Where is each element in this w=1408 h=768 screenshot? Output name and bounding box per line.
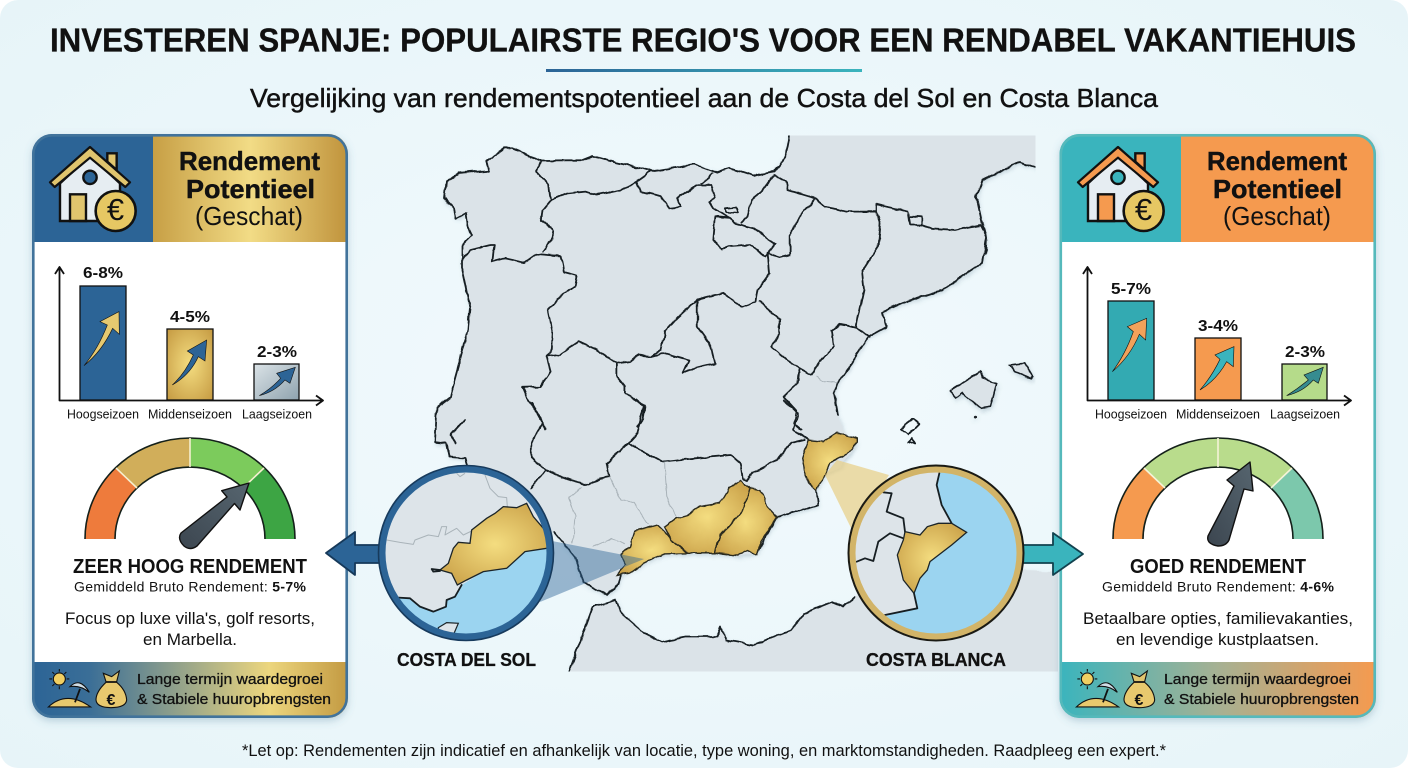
icon text: bag euro: €	[1135, 692, 1144, 709]
description text	[1083, 610, 1353, 649]
heading: Rendement Potentieel	[1207, 146, 1347, 231]
heading: Rendement Potentieel: (Geschat)	[195, 201, 303, 231]
footnote: *Let op: Rendementen zijn indicatief en afhankelijk van locatie, type woning, en marktomstandigheden. Raadpleeg een expert.*	[242, 741, 1166, 760]
footer text: Lange termijn waardegroei	[137, 672, 323, 688]
bar chart: seasonal returns	[55, 265, 323, 422]
footer icons: beach and money bag	[1076, 669, 1155, 708]
title: INVESTEREN SPANJE: POPULAIRSTE REGIO'S VOOR EEN RENDABEL VAKANTIEHUIS	[50, 22, 1356, 58]
arrow: Costa del Sol to left panel	[326, 532, 382, 575]
bar chart: seasonal returns: 3-4%	[1198, 318, 1238, 335]
rating text	[73, 555, 307, 594]
bar chart: seasonal returns: Hoogseizoen	[67, 408, 139, 422]
footer text: & Stabiele huuropbrengsten	[1164, 692, 1359, 708]
bar chart: seasonal returns: 6-8%	[83, 265, 123, 282]
footer icons: beach and money bag	[48, 669, 127, 708]
land: Iberia and France	[435, 128, 1065, 680]
connector: Costa del Sol zoom beam	[540, 540, 644, 602]
bar chart: seasonal returns: Middenseizoen	[148, 408, 232, 422]
description text: en Marbella.	[143, 631, 237, 649]
regional borders north	[462, 161, 987, 430]
rating text: GOED RENDEMENT	[1130, 555, 1306, 578]
heading: Rendement Potentieel	[179, 146, 320, 231]
map of Spain	[435, 128, 1065, 680]
Balearic islands	[950, 363, 1033, 418]
panel: Costa del Sol	[32, 134, 348, 718]
heading: Rendement Potentieel: Rendement	[179, 146, 320, 176]
footer text: Lange termijn waardegroei	[1164, 672, 1351, 688]
description text: Focus op luxe villa's, golf resorts,	[65, 610, 315, 628]
rating text: ZEER HOOG RENDEMENT	[73, 555, 307, 578]
bar chart: seasonal returns: 5-7%	[1111, 281, 1151, 298]
icon text: euro: €	[107, 192, 124, 227]
footer text: & Stabiele huuropbrengsten	[137, 692, 331, 708]
bar chart: seasonal returns: Hoogseizoen	[1095, 408, 1167, 422]
heading: Rendement Potentieel: Potentieel	[1213, 174, 1342, 204]
description text: Betaalbare opties, familievakanties,	[1083, 610, 1353, 628]
magnifier: Costa del Sol	[378, 466, 557, 640]
footer text	[1164, 672, 1359, 708]
highlighted regions: Andalusia coast and Alicante	[616, 433, 857, 575]
label: Costa del Sol: COSTA DEL SOL	[397, 650, 536, 670]
rating text: Gemiddeld Bruto Rendement: 5-7%	[74, 578, 307, 594]
subtitle: Vergelijking van rendementspotentieel aan de Costa del Sol en Costa Blanca	[250, 83, 1159, 113]
label: Costa Blanca: COSTA BLANCA	[866, 650, 1006, 670]
bar chart: seasonal returns: 2-3%	[1285, 344, 1325, 361]
heading: Rendement Potentieel: Potentieel	[186, 174, 315, 204]
bar chart: seasonal returns: 4-5%	[170, 309, 210, 326]
icon text: euro: €	[1135, 192, 1152, 227]
gauge: very high return	[85, 438, 295, 548]
heading: Rendement Potentieel: (Geschat)	[1223, 201, 1331, 231]
heading: Rendement Potentieel: Rendement	[1207, 146, 1347, 176]
bar chart: seasonal returns: Laagseizoen	[1270, 408, 1340, 422]
connector: Costa Blanca zoom beam	[825, 460, 889, 532]
icon: house with euro coin	[50, 147, 136, 231]
title underline	[546, 69, 862, 72]
icon text: bag euro: €	[107, 692, 116, 709]
coastline strokes	[435, 130, 1042, 680]
description text: en levendige kustplaatsen.	[1116, 631, 1319, 649]
gauge: good return	[1113, 438, 1323, 546]
Africa	[566, 570, 1065, 680]
footer text	[137, 672, 331, 708]
description text	[65, 610, 315, 649]
panel: Costa Blanca	[1060, 134, 1376, 718]
rating text: Gemiddeld Bruto Rendement: 4-6%	[1102, 578, 1335, 594]
bar chart: seasonal returns: Laagseizoen	[242, 408, 312, 422]
arrow: Costa Blanca to right panel	[1022, 533, 1083, 575]
regional borders south	[451, 400, 919, 547]
bar chart: seasonal returns	[1083, 267, 1351, 422]
bar chart: seasonal returns: 2-3%	[257, 344, 297, 361]
rating text	[1102, 555, 1335, 594]
icon: house with euro coin	[1078, 147, 1164, 231]
bar chart: seasonal returns: Middenseizoen	[1176, 408, 1260, 422]
magnifier: Costa Blanca	[848, 465, 1027, 640]
